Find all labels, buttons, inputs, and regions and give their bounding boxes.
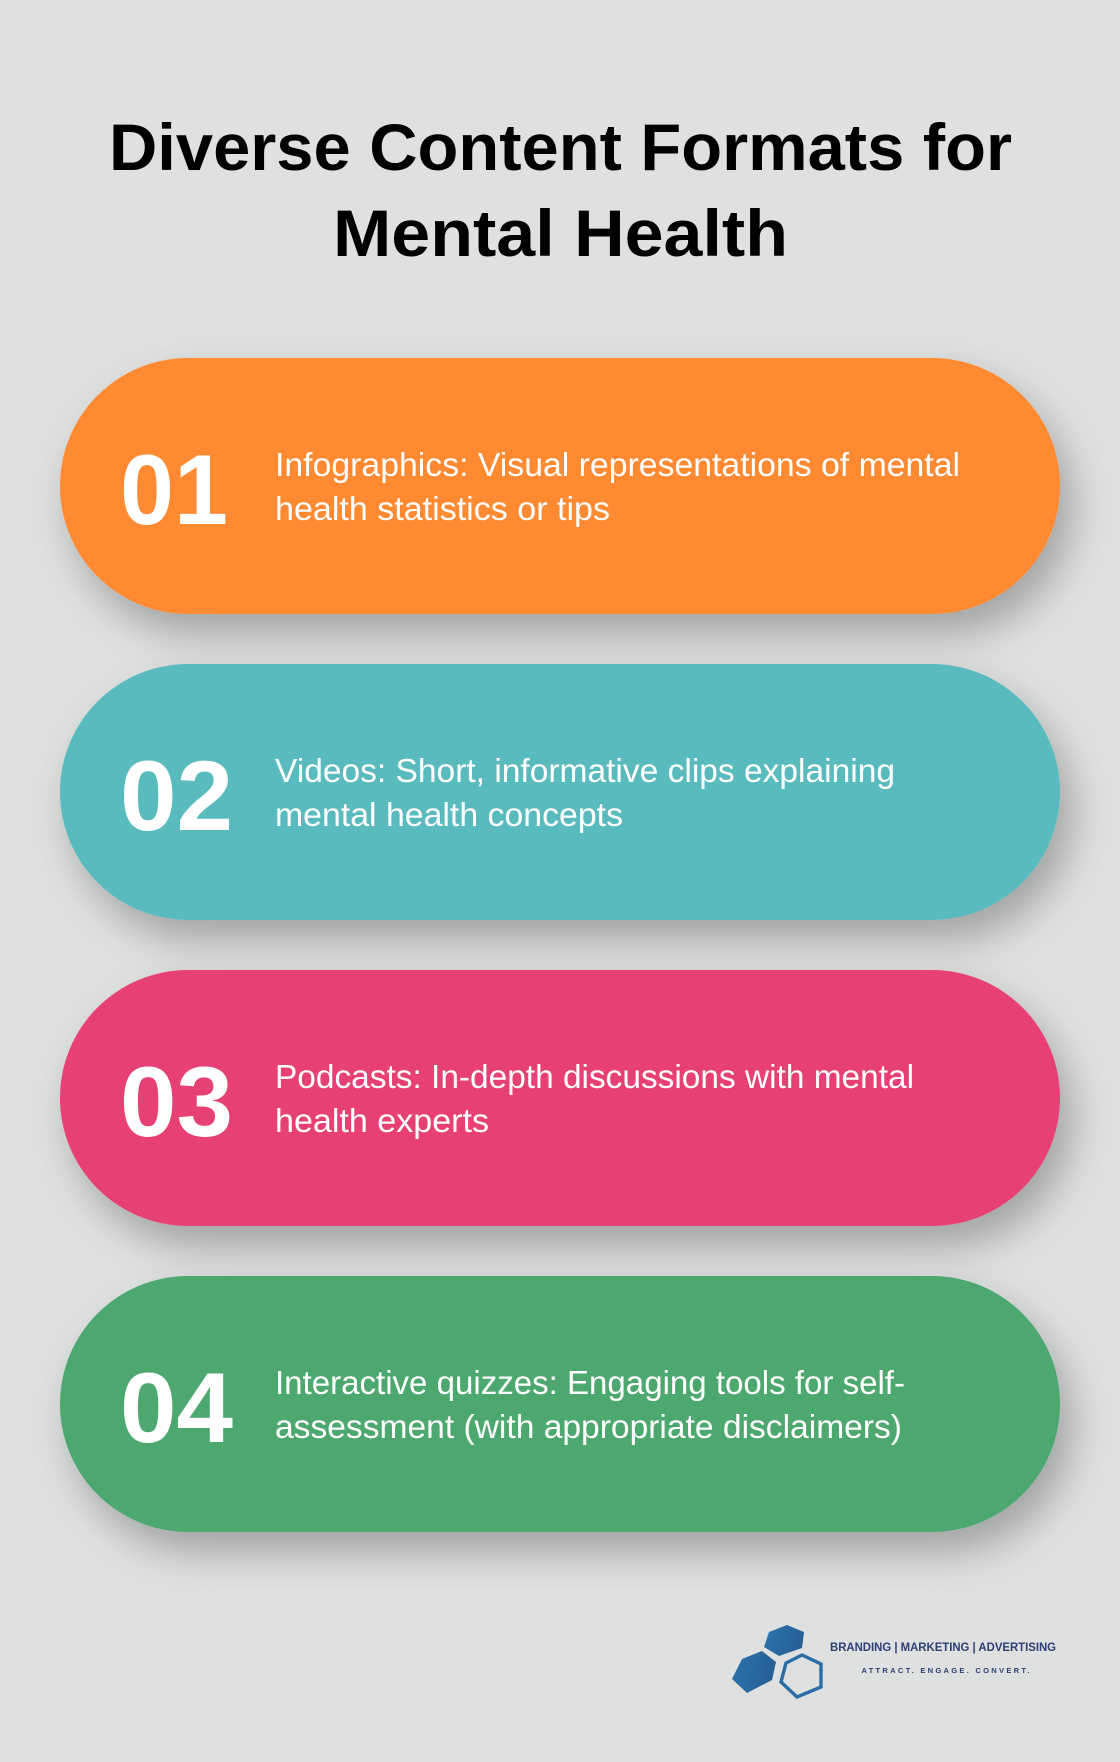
teal pill background [60, 664, 1060, 920]
number 04: 04 [120, 1352, 233, 1463]
title: Mental Health [333, 196, 788, 270]
green pill background [60, 1276, 1060, 1532]
panel: 04 interactive quizzes [60, 1276, 1060, 1532]
description 02: Videos: Short, informative clips explaining [275, 752, 895, 789]
title [109, 110, 1012, 270]
title: Diverse Content Formats for [109, 110, 1012, 184]
orange pill background [60, 358, 1060, 614]
number 01: 01 [120, 434, 228, 545]
logo [732, 1625, 1056, 1697]
logo tagline [830, 1640, 1056, 1675]
number 03: 03 [120, 1046, 233, 1157]
panel: 01 infographics [60, 358, 1060, 614]
description 01: health statistics or tips [275, 490, 610, 527]
description 04 [275, 1364, 905, 1445]
description 02 [275, 752, 895, 833]
number 02: 02 [120, 740, 233, 851]
description 04: Interactive quizzes: Engaging tools for self- [275, 1364, 905, 1401]
panel: 02 videos [60, 664, 1060, 920]
icon: hexagons [732, 1625, 821, 1697]
description 03: Podcasts: In-depth discussions with mental [275, 1058, 914, 1095]
logo tagline: BRANDING | MARKETING | ADVERTISING [830, 1640, 1056, 1654]
description 01: Infographics: Visual representations of mental [275, 446, 960, 483]
logo tagline: ATTRACT. ENGAGE. CONVERT. [862, 1666, 1030, 1675]
description 02: mental health concepts [275, 796, 623, 833]
pink pill background [60, 970, 1060, 1226]
panel: 03 podcasts [60, 970, 1060, 1226]
description 03: health experts [275, 1102, 489, 1139]
description 01 [275, 446, 960, 527]
description 03 [275, 1058, 914, 1139]
description 04: assessment (with appropriate disclaimers) [275, 1408, 902, 1445]
